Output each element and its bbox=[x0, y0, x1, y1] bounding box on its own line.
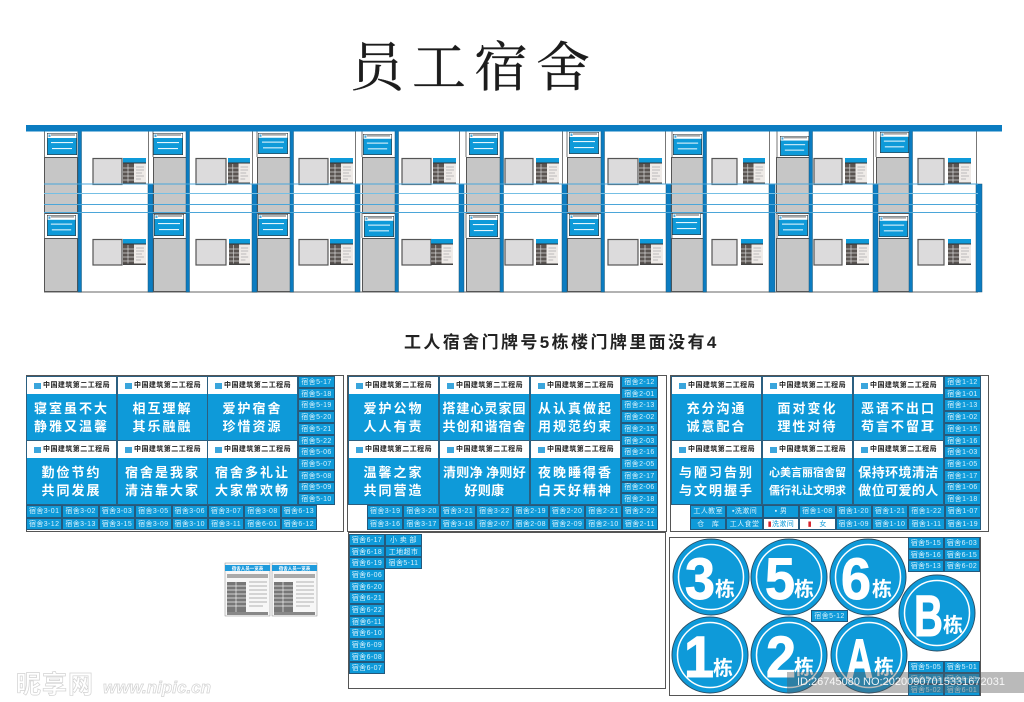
slogan card: 爱护宿舍: 中国建筑第二工程局 bbox=[224, 382, 291, 389]
slogan card: 相互理解: 中国建筑第二工程局 bbox=[134, 382, 201, 389]
sign: building 2: 2 bbox=[766, 625, 796, 690]
room tags: top right bbox=[908, 537, 980, 572]
slogan card: 从认真做起 bbox=[530, 376, 621, 441]
room tags: bottom rows: 宿舍3-03 bbox=[102, 508, 132, 515]
room tags: side column: 宿舍2-05 bbox=[624, 461, 655, 468]
slogan card: 宿舍是我家: 清洁靠大家 bbox=[125, 480, 200, 499]
sign: building B: B bbox=[914, 584, 943, 649]
staff list board 2: 宿舍人员一览表 bbox=[279, 565, 311, 572]
room tags: bottom rows: 宿舍2-11 bbox=[625, 521, 655, 528]
room tags: side column: 宿舍2-18 bbox=[624, 496, 655, 503]
slogan card: 与陋习告别: 与陋习告别 bbox=[679, 462, 754, 481]
slogan card: 面对变化: 理性对待 bbox=[777, 416, 838, 435]
slogan card: 搭建心灵家园: 中国建筑第二工程局 bbox=[456, 382, 523, 389]
room tags: top right: 宿舍6-15 bbox=[947, 552, 977, 558]
watermark: image id: ID:26745080 NO:20200907015331672031 bbox=[797, 676, 1005, 688]
room tags: top right: 宿舍5-16 bbox=[911, 552, 941, 558]
room tags: bottom rows: 宿舍3-11 bbox=[211, 521, 241, 528]
slogan card: 宿舍多礼让: 中国建筑第二工程局 bbox=[224, 446, 291, 453]
room tags: bottom rows bbox=[26, 505, 317, 530]
room tags: bottom rows: 宿舍1-07 bbox=[948, 508, 978, 515]
room tags: column 1: 宿舍6-10 bbox=[352, 630, 382, 637]
slogan card: 保持环境清洁: 保持环境清洁 bbox=[858, 462, 939, 481]
room tags: bottom rows: ▪ 男 bbox=[775, 508, 787, 515]
sign: building 6 bbox=[830, 539, 906, 615]
room tags: bottom rows: 宿舍3-09 bbox=[138, 521, 169, 528]
room tags: bottom rows: 宿舍3-07 bbox=[211, 508, 241, 515]
room tags: bottom right: 宿舍6-01 bbox=[947, 687, 977, 694]
slogan card: 相互理解: 其乐融融 bbox=[132, 416, 192, 435]
slogan card: 恶语不出口 bbox=[853, 376, 944, 441]
room tags: bottom rows: 宿舍1-21 bbox=[875, 508, 905, 515]
room tags: bottom rows: 宿舍3-15 bbox=[102, 521, 132, 528]
slogan card: 相互理解: 相互理解 bbox=[132, 398, 192, 417]
slogan card: 搭建心灵家园: 共创和谐宿舍 bbox=[442, 416, 526, 435]
slogan card: 保持环境清洁 bbox=[853, 440, 944, 505]
slogan card: 夜晚睡得香: 中国建筑第二工程局 bbox=[547, 446, 614, 453]
slogan card: 寝室虽不大: 中国建筑第二工程局 bbox=[43, 382, 110, 389]
slogan card: 宿舍是我家: 宿舍是我家 bbox=[125, 462, 200, 481]
room tags: bottom rows: 仓 库 bbox=[697, 521, 719, 528]
room tags: bottom rows: 工人教室 bbox=[693, 508, 723, 515]
building elevation bbox=[26, 125, 1002, 293]
slogan card: 宿舍多礼让 bbox=[207, 440, 298, 505]
slogan card: 勤俭节约: 共同发展 bbox=[41, 480, 102, 499]
room tags: side column: 宿舍1-05 bbox=[947, 461, 978, 468]
slogan card: 温馨之家: 共同营造 bbox=[363, 480, 424, 499]
room tags: side column: 宿舍2-03 bbox=[624, 438, 655, 444]
room tags: column 1: 宿舍6-22 bbox=[352, 607, 382, 614]
room tags: side column: 宿舍2-17 bbox=[624, 473, 655, 480]
slogan card: 爱护宿舍: 爱护宿舍 bbox=[222, 398, 282, 417]
room tags: column 1: 宿舍6-11 bbox=[352, 618, 382, 626]
room tags: bottom rows: 宿舍3-05 bbox=[138, 508, 169, 515]
room tags: side column: 宿舍2-16 bbox=[624, 449, 655, 456]
room tags: bottom rows: 宿舍1-08 bbox=[802, 508, 833, 515]
panel: door signs block 1 bbox=[26, 375, 344, 532]
room tags: top right: 宿舍6-03 bbox=[947, 540, 977, 547]
room tags: side column: 宿舍2-12 bbox=[624, 379, 655, 386]
panel: building number signs bbox=[669, 537, 981, 696]
slogan card: 爱护公物: 人人有责 bbox=[363, 416, 424, 435]
room tags: side column bbox=[944, 376, 981, 505]
notice boards bbox=[123, 158, 971, 265]
sign: building A bbox=[831, 617, 907, 693]
slogan card: 勤俭节约 bbox=[26, 440, 117, 505]
room tags: bottom rows: 宿舍2-07 bbox=[479, 521, 510, 528]
slogan card: 清则净: 好则康 bbox=[465, 480, 504, 499]
slogan card: 相互理解 bbox=[117, 376, 208, 441]
room tags: side column: 宿舍5-17 bbox=[301, 379, 332, 386]
room tags: bottom right: 宿舍6-05 bbox=[947, 676, 977, 682]
slogan card: 清则净: 中国建筑第二工程局 bbox=[456, 446, 523, 453]
slogan card: 充分沟通 bbox=[671, 376, 762, 441]
slogan card: 寝室虽不大 bbox=[26, 376, 117, 441]
slogan card: 心美言丽: 儒行礼让文明求 bbox=[769, 482, 846, 498]
sign: building 1: 栋 bbox=[713, 652, 733, 681]
room tags: bottom rows: 宿舍3-17 bbox=[406, 521, 437, 528]
slogan card: 勤俭节约: 勤俭节约 bbox=[41, 462, 102, 481]
room tags: bottom rows: 宿舍1-10 bbox=[875, 521, 905, 528]
sign: building A: 栋 bbox=[874, 651, 894, 680]
slogan card: 充分沟通: 诚意配合 bbox=[686, 416, 746, 435]
room tags: bottom rows: 宿舍3-21 bbox=[443, 508, 473, 515]
slogan card: 爱护公物 bbox=[348, 376, 439, 441]
sign: building 5: 栋 bbox=[794, 573, 814, 602]
room tags: bottom rows: 宿舍1-22 bbox=[911, 508, 942, 515]
room tags: side column: 宿舍5-21 bbox=[301, 426, 332, 433]
slogan card: 心美言丽: 中国建筑第二工程局 bbox=[779, 446, 846, 453]
slogan card: 寝室虽不大: 寝室虽不大 bbox=[34, 398, 109, 417]
room tags: side column: 宿舍1-13 bbox=[947, 402, 978, 409]
slogan card: 宿舍多礼让: 大家常欢畅 bbox=[215, 480, 290, 499]
walls bbox=[44, 131, 978, 292]
slogan card: 面对变化: 面对变化 bbox=[777, 398, 838, 417]
room tags: bottom rows: 宿舍3-18 bbox=[443, 521, 473, 528]
slogan card: 面对变化: 中国建筑第二工程局 bbox=[779, 382, 846, 389]
room tags: side column: 宿舍5-07 bbox=[301, 461, 332, 468]
room tags: bottom rows: 宿舍3-22 bbox=[479, 508, 510, 515]
doors bbox=[44, 131, 910, 292]
slogan card: 恶语不出口: 中国建筑第二工程局 bbox=[870, 382, 937, 389]
room tags: side column: 宿舍5-10 bbox=[301, 496, 332, 503]
panel: door signs block 3 bbox=[670, 375, 989, 532]
room tags: bottom rows: 宿舍1-20 bbox=[838, 508, 869, 515]
room tags: column 2 bbox=[385, 534, 422, 569]
room tags: bottom right bbox=[908, 661, 980, 696]
room tags: column 1: 宿舍6-07 bbox=[352, 665, 382, 672]
slogan card: 恶语不出口: 苟言不留耳 bbox=[861, 416, 936, 435]
room tags: side column: 宿舍2-02 bbox=[624, 414, 655, 421]
room tags: bottom right: 宿舍5-03 bbox=[911, 676, 941, 682]
room tags: column 1: 宿舍6-20 bbox=[352, 584, 382, 590]
room tags: column 1: 宿舍6-19 bbox=[352, 560, 382, 567]
balcony rails bbox=[44, 184, 978, 212]
room tags: column 2: 宿舍5-11 bbox=[389, 560, 418, 567]
room tag: 5-12: 宿舍5-12 bbox=[814, 613, 845, 620]
sign: building 1 bbox=[672, 617, 748, 693]
slogan card: 保持环境清洁: 中国建筑第二工程局 bbox=[870, 446, 937, 453]
room tags: side column: 宿舍2-01 bbox=[624, 391, 655, 398]
room tags: column 1: 宿舍6-08 bbox=[352, 654, 382, 660]
room tags: bottom rows: 宿舍3-01 bbox=[29, 508, 59, 515]
sign: building 2 bbox=[751, 617, 827, 693]
room tags: side column: 宿舍2-15 bbox=[624, 426, 655, 433]
slogan card: 宿舍是我家 bbox=[117, 440, 208, 505]
sign: building 6: 6 bbox=[841, 547, 871, 612]
room tags: side column: 宿舍5-09 bbox=[301, 484, 332, 491]
slogan card: 与陋习告别 bbox=[671, 440, 762, 505]
room tags: bottom right: 宿舍5-02 bbox=[911, 687, 941, 694]
slogan card: 从认真做起: 从认真做起 bbox=[538, 398, 613, 417]
room tags: bottom rows: 宿舍3-12 bbox=[29, 521, 59, 528]
room tags: bottom rows: 宿舍3-13 bbox=[65, 521, 96, 528]
room tags: bottom rows: 宿舍3-10 bbox=[174, 521, 205, 528]
slogan card: 清则净: 清则净 净则好 bbox=[443, 462, 526, 481]
sign: building 2: 栋 bbox=[794, 651, 814, 680]
slogan card: 充分沟通: 中国建筑第二工程局 bbox=[688, 382, 755, 389]
slogan card: 爱护宿舍 bbox=[207, 376, 298, 441]
room tags: bottom rows: 宿舍3-19 bbox=[370, 508, 400, 515]
sign: building A: A bbox=[846, 627, 873, 690]
room tags: column 1 bbox=[349, 534, 385, 674]
room tags: side column: 宿舍1-17 bbox=[947, 473, 978, 480]
room tags: bottom rows bbox=[690, 505, 981, 530]
sign: building 3 bbox=[673, 539, 749, 615]
room tags: column 2: 小 卖 部 bbox=[390, 537, 417, 544]
room tags: bottom rows: 宿舍2-09 bbox=[552, 521, 582, 528]
panel: door signs block 2 bbox=[347, 375, 667, 532]
room tags: bottom rows: 宿舍3-06 bbox=[174, 508, 205, 515]
room tags: column 1: 宿舍6-18 bbox=[352, 548, 382, 556]
room tags: bottom rows: ▮ bbox=[768, 521, 772, 528]
room tags: column 1: 宿舍6-09 bbox=[352, 642, 382, 649]
room tags: side column: 宿舍5-20 bbox=[301, 414, 332, 421]
slogan card: 宿舍多礼让: 宿舍多礼让 bbox=[215, 462, 290, 481]
room tags: bottom rows: 女 bbox=[819, 521, 827, 528]
slogan card: 温馨之家: 中国建筑第二工程局 bbox=[365, 446, 432, 453]
room tags: bottom rows: 宿舍1-09 bbox=[838, 521, 869, 528]
sign: building 3: 栋 bbox=[715, 573, 735, 602]
watermark: image id bbox=[787, 672, 1024, 693]
slogan card: 恶语不出口: 恶语不出口 bbox=[861, 398, 936, 417]
slogan card: 心美言丽 bbox=[762, 440, 853, 505]
room tags: bottom rows: ▮ bbox=[808, 521, 812, 528]
sign: building 3: 3 bbox=[685, 547, 715, 612]
room tags: bottom rows: 宿舍2-22 bbox=[625, 508, 655, 515]
room tags: bottom rows: 宿舍6-12 bbox=[284, 521, 314, 528]
slogan card: 搭建心灵家园: 搭建心灵家园 bbox=[442, 398, 526, 417]
room tags: bottom rows: 宿舍3-02 bbox=[65, 508, 96, 515]
slogan card: 爱护宿舍: 珍惜资源 bbox=[222, 416, 282, 435]
slogan card: 温馨之家 bbox=[348, 440, 439, 505]
blue pillars bbox=[78, 131, 982, 292]
room tags: column 1: 宿舍6-21 bbox=[352, 595, 382, 602]
room tags: bottom rows: 宿舍2-21 bbox=[588, 508, 619, 515]
slogan card: 从认真做起: 中国建筑第二工程局 bbox=[547, 382, 614, 389]
room tags: bottom rows: 宿舍6-01 bbox=[247, 521, 278, 528]
room tags: side column bbox=[298, 376, 335, 505]
room tags: side column: 宿舍5-19 bbox=[301, 402, 332, 409]
windows bbox=[93, 158, 944, 265]
room tags: bottom rows: 宿舍1-19 bbox=[948, 521, 978, 528]
room tags: bottom rows: 宿舍2-20 bbox=[552, 508, 582, 515]
slogan card: 寝室虽不大: 静雅又温馨 bbox=[34, 416, 109, 435]
room tags: bottom rows: 宿舍3-08 bbox=[247, 508, 278, 515]
sign: building B bbox=[899, 575, 975, 651]
slogan card: 爱护公物: 爱护公物 bbox=[363, 398, 424, 417]
room tags: side column: 宿舍1-06 bbox=[947, 484, 978, 491]
watermark: site logo: 昵享网 www.nipic.cn bbox=[16, 665, 211, 701]
slogan card: 宿舍是我家: 中国建筑第二工程局 bbox=[134, 446, 201, 453]
panel: extra room tags bbox=[348, 532, 666, 689]
room tags: side column bbox=[621, 376, 658, 505]
room tags: side column: 宿舍1-03 bbox=[947, 449, 978, 456]
room tags: bottom rows: 宿舍2-08 bbox=[515, 521, 546, 528]
subtitle: 工人宿舍门牌号5栋楼门牌里面没有4 bbox=[404, 333, 719, 352]
room tags: bottom rows: 洗漱间 bbox=[772, 521, 794, 528]
sign: building 5: 5 bbox=[765, 547, 795, 612]
room tags: column 2: 工地超市 bbox=[389, 548, 418, 556]
sign: building 6: 栋 bbox=[872, 573, 892, 602]
slogan card: 清则净 bbox=[439, 440, 530, 505]
sign: building 5 bbox=[751, 539, 827, 615]
room tags: column 1: 宿舍6-06 bbox=[352, 572, 382, 579]
room tags: side column: 宿舍5-08 bbox=[301, 473, 332, 480]
room tags: column 1: 宿舍6-17 bbox=[352, 537, 382, 544]
room tags: bottom rows: 宿舍2-10 bbox=[588, 521, 619, 528]
room tags: bottom right: 宿舍5-01 bbox=[947, 664, 977, 671]
slogan card: 夜晚睡得香 bbox=[530, 440, 621, 505]
room tags: bottom rows: 工人食堂 bbox=[730, 521, 759, 528]
staff list board 1: 宿舍人员一览表 bbox=[232, 565, 264, 572]
room tags: side column: 宿舍1-18 bbox=[947, 496, 978, 503]
room tags: bottom rows: ▪洗漱间 bbox=[732, 508, 757, 515]
room tags: bottom right: 宿舍5-05 bbox=[911, 664, 941, 671]
slogan card: 心美言丽: 心美言丽宿舍留 bbox=[769, 464, 846, 480]
room tags: side column: 宿舍1-16 bbox=[947, 438, 978, 444]
room tags: bottom rows: 宿舍3-20 bbox=[406, 508, 437, 515]
sign: building 1: 1 bbox=[684, 625, 714, 690]
room tags: top right: 宿舍5-15 bbox=[911, 540, 941, 547]
room tags: top right: 宿舍5-13 bbox=[911, 563, 941, 570]
room tags: side column: 宿舍2-06 bbox=[624, 484, 655, 491]
room tags: side column: 宿舍1-15 bbox=[947, 426, 978, 433]
slogan card: 面对变化 bbox=[762, 376, 853, 441]
slogan card: 与陋习告别: 中国建筑第二工程局 bbox=[688, 446, 755, 453]
room tags: top right: 宿舍6-02 bbox=[947, 563, 977, 570]
title: 员工宿舍 bbox=[350, 38, 598, 98]
sign: building B: 栋 bbox=[943, 609, 963, 638]
slogan card: 夜晚睡得香: 白天好精神 bbox=[538, 480, 613, 499]
room tags: bottom rows bbox=[367, 505, 658, 530]
room tags: side column: 宿舍1-01 bbox=[947, 391, 978, 398]
slogan card: 与陋习告别: 与文明握手 bbox=[679, 480, 754, 499]
room tags: side column: 宿舍2-13 bbox=[624, 402, 655, 409]
room tags: side column: 宿舍5-06 bbox=[301, 449, 332, 456]
slogan card: 充分沟通: 充分沟通 bbox=[686, 398, 746, 417]
room tags: bottom rows: 宿舍2-19 bbox=[515, 508, 546, 515]
slogan card: 保持环境清洁: 做位可爱的人 bbox=[858, 480, 939, 499]
room tags: side column: 宿舍1-02 bbox=[947, 414, 978, 421]
room tags: bottom rows: 宿舍3-16 bbox=[370, 521, 400, 528]
slogan card: 温馨之家: 温馨之家 bbox=[363, 462, 424, 481]
slogan card: 搭建心灵家园 bbox=[439, 376, 530, 441]
slogan card: 勤俭节约: 中国建筑第二工程局 bbox=[43, 446, 110, 453]
slogan card: 夜晚睡得香: 夜晚睡得香 bbox=[538, 462, 613, 481]
slogan card: 爱护公物: 中国建筑第二工程局 bbox=[365, 382, 432, 389]
slogan card: 从认真做起: 用规范约束 bbox=[538, 416, 613, 435]
room tags: bottom rows: 宿舍6-13 bbox=[284, 508, 314, 515]
door signs bbox=[47, 132, 909, 237]
roof beam bbox=[26, 125, 1002, 132]
room tags: side column: 宿舍1-12 bbox=[947, 379, 978, 386]
room tags: bottom rows: 宿舍1-11 bbox=[911, 521, 941, 528]
room tags: side column: 宿舍5-18 bbox=[301, 391, 332, 398]
room tags: side column: 宿舍5-22 bbox=[301, 438, 332, 444]
